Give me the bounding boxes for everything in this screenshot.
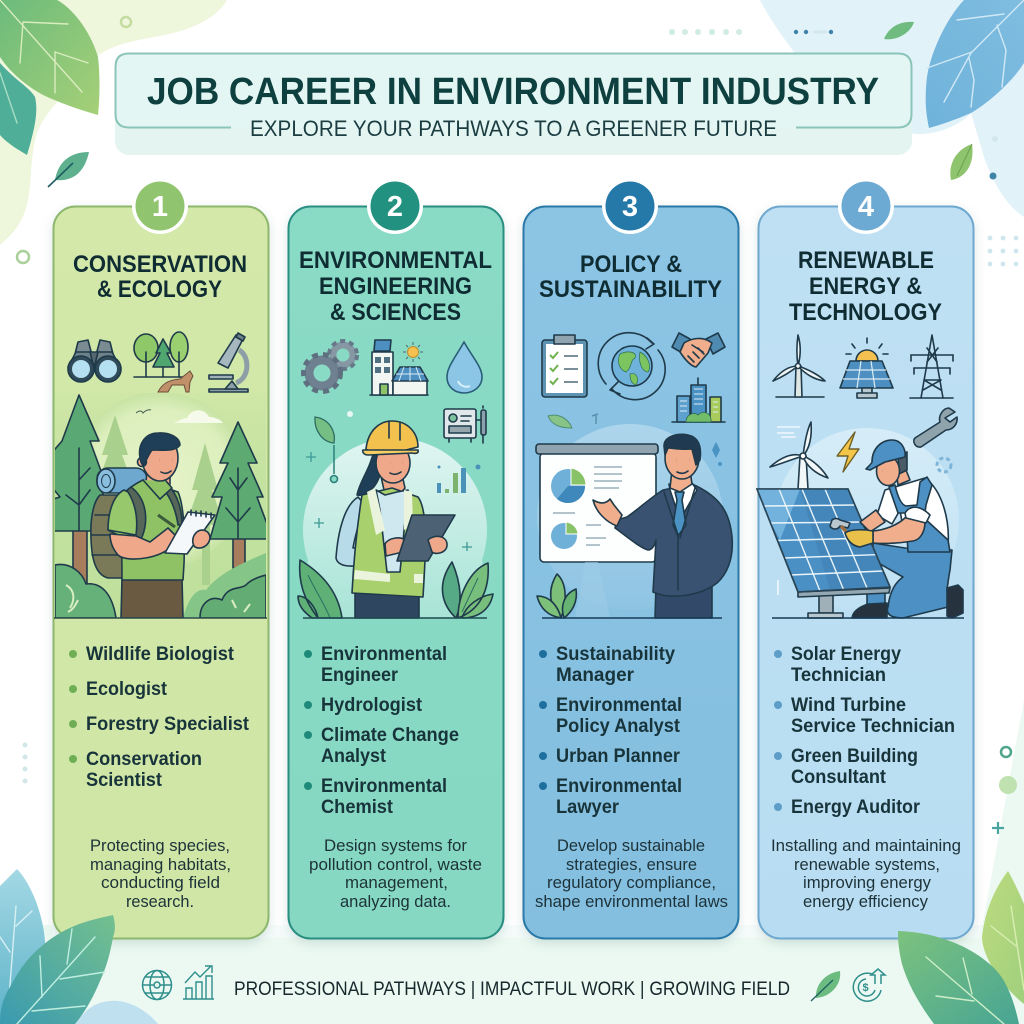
panel 1 heading: CONSERVATION	[73, 251, 247, 278]
plants	[298, 560, 493, 618]
panel 4 heading: ENERGY &	[809, 273, 922, 300]
icon: checklist clipboard	[542, 335, 587, 397]
ranger body	[108, 433, 184, 618]
panel 4 job list: Service Technician	[791, 716, 955, 737]
decorative leaves: bottom left	[0, 869, 158, 1024]
panel 3 number badge: 3	[622, 191, 638, 223]
panel 1 description: research.	[126, 893, 194, 911]
icon: lightning bolt	[837, 432, 859, 472]
scene circle	[303, 438, 487, 618]
panel 2 heading: ENGINEERING	[319, 273, 472, 300]
panel 2 description: management,	[345, 874, 448, 892]
icon: water drop	[447, 342, 482, 393]
panel 4 description: Installing and maintaining	[771, 837, 961, 855]
icon: solar with sun	[840, 338, 893, 398]
panel 4 description: improving energy	[803, 874, 932, 892]
panel 2 heading: & SCIENCES	[330, 299, 461, 326]
icon: lab machine	[444, 406, 486, 443]
icon: globe with arrows	[598, 333, 665, 400]
hammer and glove	[830, 518, 873, 547]
panel 1 description: managing habitats,	[90, 856, 231, 874]
bushes	[55, 553, 266, 618]
panel 4 job list: Solar Energy	[791, 644, 901, 665]
pie chart	[551, 468, 586, 503]
panel 3 heading: SUSTAINABILITY	[539, 276, 722, 303]
panel 4 heading	[789, 247, 942, 326]
panel 4 description	[771, 837, 961, 911]
panel 1 number badge	[132, 178, 188, 234]
panel 3 description	[535, 837, 728, 911]
ground line	[542, 617, 722, 619]
icon: data bars	[437, 464, 480, 493]
icon: growth chart	[183, 966, 214, 999]
panel 4: renewable energy and technology	[757, 178, 974, 938]
panel 2 job list: Climate Change	[321, 725, 459, 746]
scene: field researcher in forest	[50, 392, 270, 618]
panel 2 description: analyzing data.	[340, 893, 451, 911]
panel 1 number badge: 1	[152, 191, 168, 223]
panel 2 description: pollution control, waste	[309, 856, 482, 874]
presenter figure	[593, 434, 732, 618]
back trees	[98, 415, 224, 585]
panel 2: environmental engineering and sciences	[288, 178, 504, 938]
panel 1 heading: & ECOLOGY	[97, 276, 222, 303]
panel 4 job list: Energy Auditor	[791, 797, 921, 818]
panel 1 description	[90, 837, 231, 911]
decorative leaf: top left teal	[0, 63, 36, 155]
header banner	[115, 53, 912, 155]
decorative leaf: left small	[48, 152, 89, 187]
panel 3 description: Develop sustainable	[557, 837, 705, 855]
decorative leaf: top left green	[0, 0, 100, 115]
panel 4 job list: Consultant	[791, 767, 887, 788]
panel 2 number badge: 2	[387, 191, 403, 223]
panel 1 job list: Ecologist	[86, 679, 168, 700]
ground line	[54, 617, 267, 619]
decorative leaves: bottom right	[898, 871, 1024, 1024]
panel 2 description: Design systems for	[324, 837, 468, 855]
left tree	[55, 394, 104, 584]
icon: trees and wildlife	[134, 332, 193, 392]
title: JOB CAREER IN ENVIRONMENT INDUSTRY	[147, 71, 879, 113]
panel 3 job list: Environmental	[556, 776, 682, 797]
panel 2 heading	[299, 247, 492, 326]
panel 4 job list	[774, 644, 955, 818]
panel 3 job list	[539, 644, 682, 818]
panel 3 job list: Manager	[556, 665, 635, 686]
icon: wrench	[914, 408, 957, 447]
panel 4 number badge	[838, 178, 894, 234]
pie chart small	[551, 522, 578, 549]
icon: green building with solar	[370, 340, 428, 395]
panel 3 job list: Lawyer	[556, 797, 620, 818]
panel 2 job list: Chemist	[321, 797, 394, 818]
panel 4 description: energy efficiency	[803, 893, 929, 911]
panel 3 description: strategies, ensure	[566, 856, 697, 874]
panel 4 description: renewable systems,	[794, 856, 940, 874]
icon: city	[672, 378, 725, 422]
icon: globe	[142, 970, 172, 1000]
footer strip	[142, 966, 885, 1001]
subtitle: EXPLORE YOUR PATHWAYS TO A GREENER FUTURE	[250, 116, 777, 141]
big wind turbine	[770, 422, 828, 489]
panel 4 job list: Wind Turbine	[791, 695, 906, 716]
panel 3 number badge	[602, 178, 658, 234]
panel 4 number badge: 4	[858, 191, 874, 223]
icon: handshake	[672, 333, 725, 367]
panel 3 heading: POLICY &	[580, 251, 682, 278]
right tree	[210, 422, 270, 568]
clouds and bird	[136, 410, 223, 423]
panel 4 job list: Technician	[791, 665, 886, 686]
panel 3 job list: Sustainability	[556, 644, 675, 665]
panel 3 job list: Policy Analyst	[556, 716, 681, 737]
panel 3 job list: Environmental	[556, 695, 682, 716]
scene circle	[775, 427, 959, 612]
icon: leaf	[548, 415, 572, 428]
panel 1 job list	[69, 644, 250, 791]
ground line	[303, 617, 487, 619]
icon: microscope	[209, 333, 248, 392]
icon: gears	[304, 341, 357, 392]
icon: money growth	[853, 969, 885, 1001]
panel 1 job list: Conservation	[86, 749, 202, 770]
icon: money growth: $	[862, 982, 869, 994]
icon: binoculars	[68, 340, 121, 382]
backpack and bedroll	[91, 468, 147, 578]
tablet	[397, 515, 455, 561]
presentation board	[536, 444, 658, 618]
panel 2 job list: Environmental	[321, 644, 447, 665]
icon: gear faint	[937, 458, 951, 472]
decorative leaf: right small	[950, 144, 973, 180]
panel 4 job list: Green Building	[791, 746, 918, 767]
plant	[537, 574, 576, 618]
panel 1 job list: Forestry Specialist	[86, 714, 250, 735]
panel 2 job list: Hydrologist	[321, 695, 423, 716]
notepad	[165, 510, 215, 554]
panel 3 heading	[539, 251, 722, 303]
panel 1 description: conducting field	[101, 874, 220, 892]
panel 3: policy and sustainability	[524, 178, 738, 938]
panel 3 job list: Urban Planner	[556, 746, 681, 767]
panel 2 description	[309, 837, 482, 911]
technician upper body	[860, 440, 950, 552]
panel 4 heading: RENEWABLE	[798, 247, 934, 274]
panel 4 heading: TECHNOLOGY	[789, 299, 942, 326]
panel 2 job list	[304, 644, 459, 818]
icon: leaf	[811, 971, 840, 1001]
scene circle and sparkles	[537, 414, 724, 610]
icon: leaf with sensor	[306, 411, 472, 551]
panel 1 job list: Scientist	[86, 770, 163, 791]
panel 3 description: regulatory compliance,	[547, 874, 716, 892]
panel 3 description: shape environmental laws	[535, 893, 728, 911]
big solar panel	[757, 489, 890, 618]
panel 1 description: Protecting species,	[90, 837, 230, 855]
ground line	[772, 617, 964, 619]
icon: power pylon	[910, 335, 953, 398]
engineer figure	[336, 421, 425, 618]
panel 1 job list: Wildlife Biologist	[86, 644, 235, 665]
decorative leaf: top right small	[884, 22, 914, 39]
decorative leaf: top right blue	[926, 0, 1024, 128]
panel 2 job list: Engineer	[321, 665, 399, 686]
panel 1 heading	[73, 251, 247, 303]
footer tagline: PROFESSIONAL PATHWAYS | IMPACTFUL WORK | GROWING FIELD	[234, 979, 790, 1000]
panel 2 number badge	[367, 178, 423, 234]
panel 2 job list: Environmental	[321, 776, 447, 797]
panel 1: conservation and ecology	[50, 178, 270, 938]
icon: wind turbine	[773, 335, 825, 397]
panel 2 job list: Analyst	[321, 746, 387, 767]
technician lower body	[852, 543, 963, 618]
panel 2 heading: ENVIRONMENTAL	[299, 247, 492, 274]
